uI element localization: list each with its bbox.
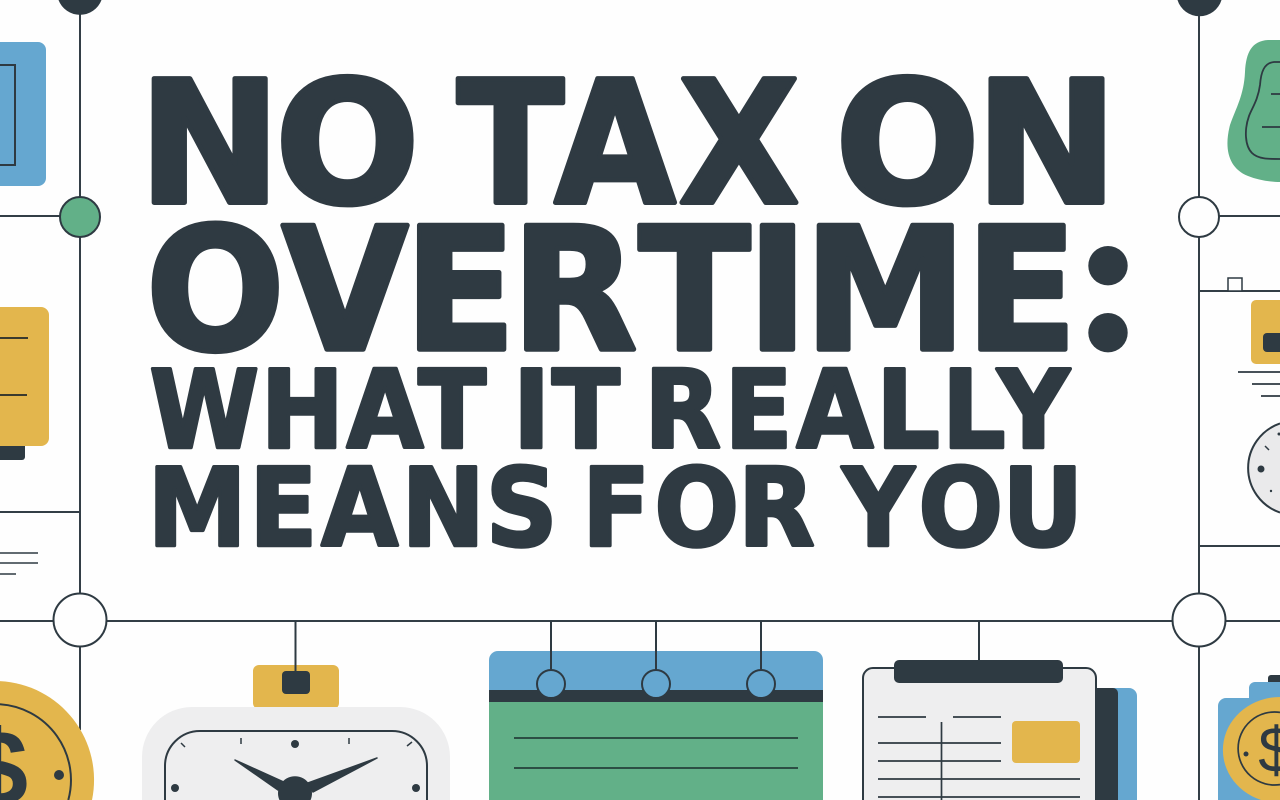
node: top right dark <box>1178 0 1222 16</box>
title: IT <box>513 349 620 474</box>
title: WHAT <box>150 349 486 474</box>
title: REALLY <box>644 349 1071 474</box>
title: MEANS <box>148 447 557 572</box>
node: lower right white <box>1172 594 1226 646</box>
icon: left text lines <box>0 553 38 574</box>
title: : <box>1079 190 1137 382</box>
icon: alarm clock <box>142 621 450 800</box>
icon: right text lines <box>1238 372 1280 396</box>
title: YOU <box>840 447 1083 572</box>
node: right white <box>1179 197 1219 237</box>
title: OVERTIME <box>146 192 1077 390</box>
icon: right clock <box>1248 424 1280 512</box>
title: ON <box>835 46 1118 244</box>
icon: right green blob <box>1227 40 1280 182</box>
icon: left blue card <box>0 42 46 186</box>
title: FOR <box>582 447 815 572</box>
title <box>139 44 1137 572</box>
icon: left coin <box>0 681 94 800</box>
title: NO <box>139 46 420 244</box>
icon: clipboard document <box>863 621 1137 800</box>
icon: right yellow card <box>1251 300 1280 364</box>
node: top left dark <box>58 0 102 15</box>
node: left green <box>60 197 100 237</box>
icon: calendar <box>489 621 823 800</box>
icon: right wallet with coin <box>1218 675 1280 800</box>
title: TAX <box>457 44 799 243</box>
node: lower left white <box>54 594 106 646</box>
icon: right small tab <box>1228 278 1242 291</box>
icon: left yellow notepad <box>0 307 49 460</box>
